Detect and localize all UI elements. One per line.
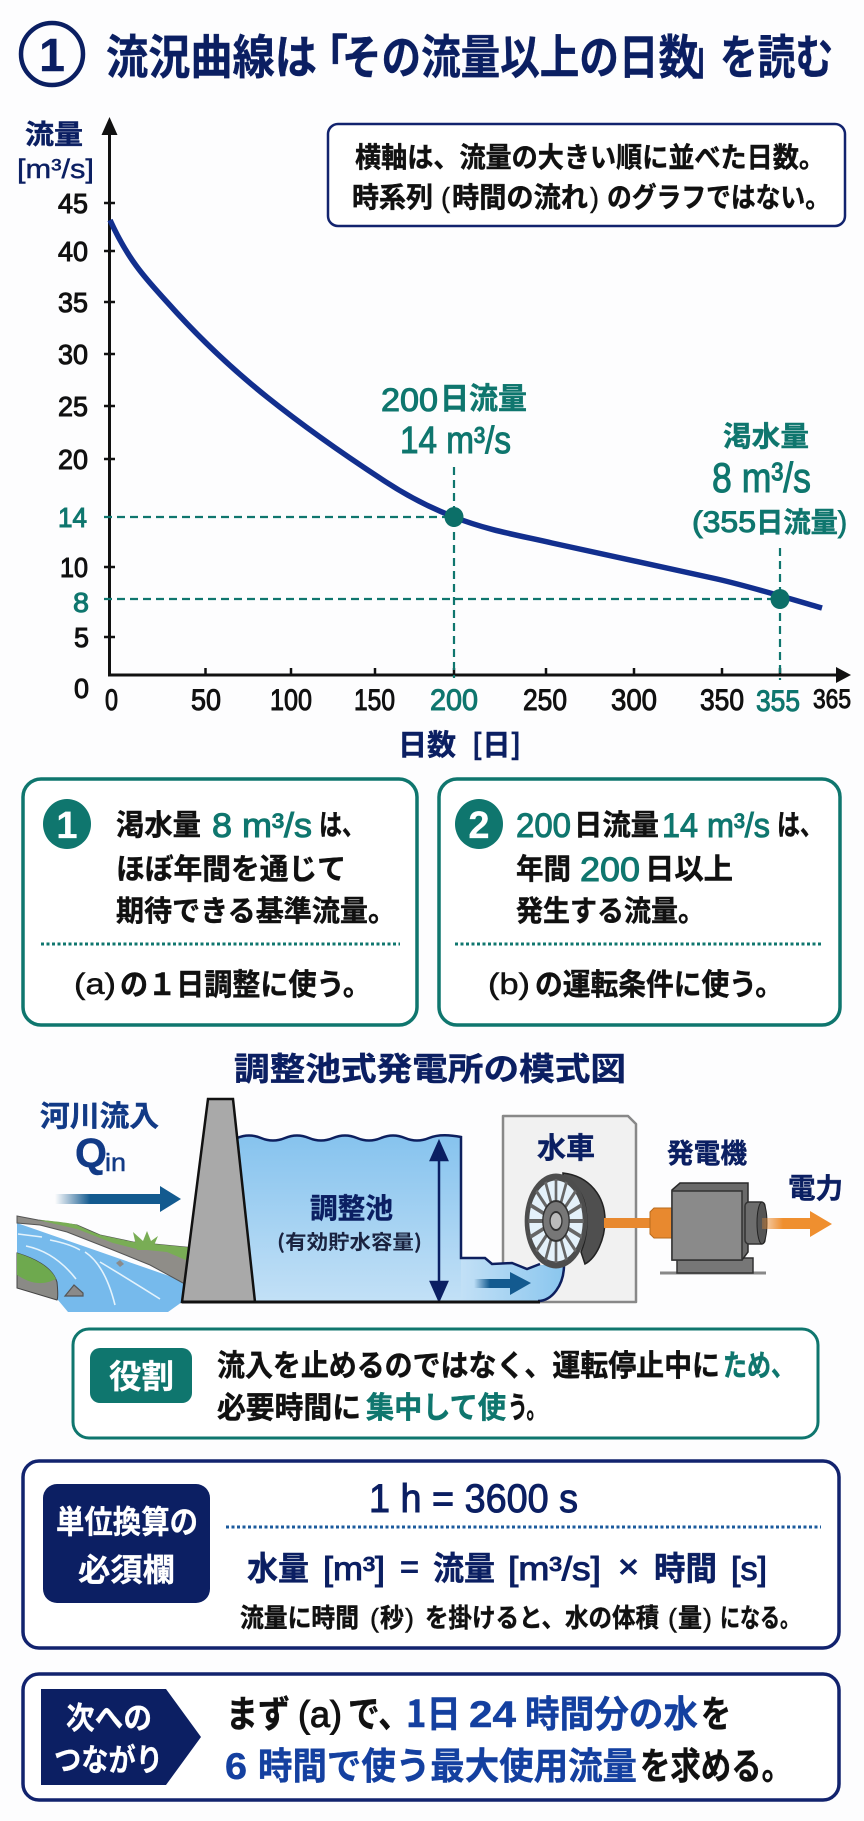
- water capacity arrow: [431, 1142, 447, 1300]
- title text: 」: [692, 19, 722, 88]
- river inflow label: Q: [75, 1130, 107, 1176]
- unit tag: 必須欄: [78, 1545, 175, 1591]
- number badge 2: 2: [468, 805, 490, 847]
- low water flow label: 日流量: [756, 501, 838, 541]
- role text: 流入を止めるのではなく、運転停止中に: [217, 1341, 720, 1385]
- next tag: 次への: [66, 1693, 152, 1738]
- role text: 集中して使: [366, 1383, 506, 1427]
- volume formula: =: [400, 1548, 419, 1585]
- panel 1 text: は、: [319, 802, 365, 844]
- flow curve: [110, 220, 822, 608]
- next text: を: [701, 1684, 731, 1738]
- volume formula: [m³]: [323, 1550, 385, 1587]
- x axis tick labels: 150: [354, 684, 395, 717]
- next text: で、: [348, 1684, 410, 1738]
- powerhouse: [503, 1116, 636, 1302]
- low water flow label: ): [838, 506, 847, 539]
- panel: unit conversion: [23, 1461, 839, 1648]
- note box: (: [441, 182, 451, 213]
- panel 1 usage: (a): [74, 968, 116, 1001]
- volume formula: 水量: [247, 1542, 309, 1590]
- y axis label: [17, 113, 94, 184]
- panel: 200 day flow: [439, 779, 840, 1025]
- volume formula: 時間: [654, 1542, 717, 1590]
- base line: [182, 1300, 540, 1304]
- title number badge: 1: [39, 29, 65, 81]
- reservoir label: (有効貯水容量): [277, 1226, 422, 1255]
- panel 1 text: 8 m³/s: [212, 807, 312, 845]
- formula note: を掛けると、水の体積: [425, 1598, 659, 1635]
- drive shaft: [604, 1208, 672, 1238]
- highlighted y labels: 14: [58, 502, 87, 533]
- x axis tick labels: 0: [105, 684, 118, 717]
- panel 2 usage: (b): [488, 968, 530, 1001]
- y axis label: 流量: [25, 113, 83, 152]
- 200-day flow label: 14 m³/s: [400, 420, 511, 462]
- panel 1 text: 期待できる基準流量。: [116, 888, 396, 930]
- panel 2 text: 200: [580, 851, 640, 889]
- highlighted x labels: 355: [756, 685, 800, 718]
- formula note: 秒: [380, 1598, 404, 1635]
- formula note: (: [668, 1603, 677, 1633]
- river inflow label: 河川流入: [40, 1093, 159, 1135]
- panel 2 text: 日流量: [574, 802, 659, 844]
- x axis tick labels: 100: [270, 684, 312, 717]
- panel 2 text: [516, 802, 823, 930]
- schematic heading: 調整池式発電所の模式図: [234, 1044, 626, 1090]
- hour equals seconds: 1 h = 3600 s: [369, 1477, 578, 1521]
- power label: 電力: [788, 1167, 843, 1207]
- role text: 必要時間に: [217, 1383, 361, 1427]
- note box: のグラフではない。: [607, 176, 830, 216]
- formula note: ): [703, 1603, 712, 1633]
- panel 2 text: は、: [777, 802, 823, 844]
- panel: role: [73, 1329, 818, 1438]
- highlighted x labels: 200: [430, 684, 478, 717]
- highlighted y labels: [58, 502, 89, 618]
- note box: 時間の流れ: [452, 176, 588, 216]
- volume formula: 流量: [433, 1542, 495, 1590]
- title text: 流況曲線は: [106, 19, 317, 88]
- reservoir water: [237, 1136, 564, 1301]
- highlighted x labels: [430, 684, 800, 718]
- formula note: [240, 1598, 800, 1635]
- next tag: [41, 1689, 201, 1785]
- unit tag: 単位換算の: [56, 1497, 198, 1543]
- x axis tick labels: 50: [191, 684, 221, 717]
- y axis tick labels: 10: [60, 552, 88, 583]
- y axis tick labels: 35: [58, 287, 88, 318]
- y axis tick labels: 40: [58, 236, 88, 267]
- y axis tick labels: 45: [58, 188, 88, 219]
- x axis label: 日数: [398, 722, 456, 764]
- low water flow label: 渇水量: [723, 415, 809, 455]
- title text: その流量以上の日数: [342, 19, 698, 88]
- next text: を求める。: [640, 1736, 792, 1790]
- volume formula: [247, 1542, 767, 1590]
- x axis tick labels: 350: [700, 684, 744, 717]
- title text: 「: [306, 19, 348, 88]
- axes: [102, 117, 851, 683]
- next tag: つながり: [54, 1735, 163, 1780]
- panel: low water flow: [23, 779, 417, 1025]
- note box: 横軸は、流量の大きい順に並べた日数。: [355, 136, 825, 176]
- discharge arrow: [474, 1272, 531, 1295]
- flow duration curve chart: [17, 113, 851, 764]
- next text: (a): [298, 1694, 342, 1735]
- formula note: になる。: [720, 1598, 800, 1635]
- title number badge: [21, 23, 83, 85]
- 200-day flow label: [381, 374, 527, 462]
- river inflow label: [40, 1093, 159, 1177]
- 200-day flow label: 200: [381, 382, 438, 418]
- next text: [225, 1684, 792, 1790]
- next text: 24: [469, 1694, 516, 1735]
- y axis tick labels: 5: [74, 622, 89, 653]
- panel 2 text: 年間: [516, 846, 571, 888]
- schematic diagram: [17, 1093, 843, 1312]
- reservoir label: 調整池: [310, 1187, 393, 1227]
- guide lines: [104, 467, 780, 680]
- river illustration: [17, 1216, 195, 1312]
- role tag: [90, 1348, 192, 1403]
- x axis tick labels: [105, 684, 851, 717]
- y axis tick labels: 20: [58, 444, 88, 475]
- wheel label: 水車: [537, 1125, 595, 1167]
- next text: まず: [226, 1684, 290, 1738]
- panel 1 text: ほぼ年間を通じて: [116, 846, 346, 888]
- panel 1 text: [116, 802, 396, 930]
- role text: [217, 1341, 795, 1427]
- panel 2 text: 200: [516, 807, 571, 845]
- y axis tick labels: 25: [58, 391, 88, 422]
- low water flow label: (355: [692, 506, 756, 539]
- generator label: 発電機: [667, 1132, 747, 1171]
- number badge 1: [43, 799, 91, 849]
- generator: [660, 1183, 767, 1273]
- x axis tick labels: 300: [611, 684, 657, 717]
- inflow arrow: [55, 1186, 181, 1212]
- formula note: (: [370, 1603, 379, 1633]
- title text: を読む: [720, 19, 833, 88]
- point markers: [444, 507, 790, 609]
- panel 2 text: 発生する流量。: [516, 888, 705, 930]
- panel 1 usage: の１日調整に使う。: [120, 960, 371, 1004]
- next text: 時間で使う最大使用流量: [258, 1736, 637, 1790]
- y axis label: [m³/s]: [17, 154, 94, 184]
- role text: う。: [508, 1383, 546, 1427]
- dam: [182, 1099, 255, 1302]
- panel 2 text: 日以上: [645, 846, 733, 888]
- low water flow label: [692, 415, 847, 541]
- note box: ): [590, 182, 599, 213]
- volume formula: ×: [618, 1548, 639, 1585]
- reservoir outline: [237, 1135, 564, 1301]
- x axis label: [398, 722, 521, 764]
- next text: 時間分の水: [525, 1684, 698, 1738]
- x axis label: [日]: [472, 722, 521, 764]
- reservoir label: [277, 1187, 422, 1255]
- y axis tick labels: [58, 188, 89, 704]
- panel: next step: [23, 1674, 839, 1800]
- panel 1 text: 渇水量: [116, 802, 201, 844]
- discharge channel: [461, 1258, 564, 1301]
- title: [21, 19, 833, 88]
- x axis tick labels: 250: [523, 684, 567, 717]
- x axis tick labels: 365: [813, 684, 851, 714]
- highlighted y labels: 8: [73, 587, 89, 618]
- panel 2 text: 14 m³/s: [662, 807, 770, 845]
- power arrow: [762, 1211, 832, 1237]
- note box: 時系列: [352, 176, 433, 216]
- title text: [106, 19, 833, 88]
- y axis tick labels: 0: [74, 673, 89, 704]
- number badge 2: [455, 799, 503, 849]
- note box: [328, 124, 845, 226]
- formula note: ): [405, 1603, 414, 1633]
- river inflow label: in: [105, 1149, 126, 1177]
- next text: 6: [225, 1746, 247, 1787]
- formula note: 流量に時間: [240, 1598, 359, 1635]
- role text: ため、: [723, 1341, 795, 1385]
- y axis tick labels: 30: [58, 339, 88, 370]
- formula note: 量: [678, 1598, 702, 1635]
- 200-day flow label: 日流量: [440, 374, 527, 418]
- volume formula: [m³/s]: [508, 1550, 601, 1587]
- water wheel: [527, 1173, 605, 1265]
- unit tag: [43, 1484, 210, 1603]
- next text: 1日: [406, 1684, 461, 1738]
- number badge 1: 1: [56, 805, 78, 847]
- panel 2 usage: の運転条件に使う。: [535, 960, 783, 1004]
- low water flow label: 8 m³/s: [712, 454, 811, 501]
- role tag: 役割: [109, 1350, 174, 1398]
- volume formula: [s]: [731, 1550, 767, 1587]
